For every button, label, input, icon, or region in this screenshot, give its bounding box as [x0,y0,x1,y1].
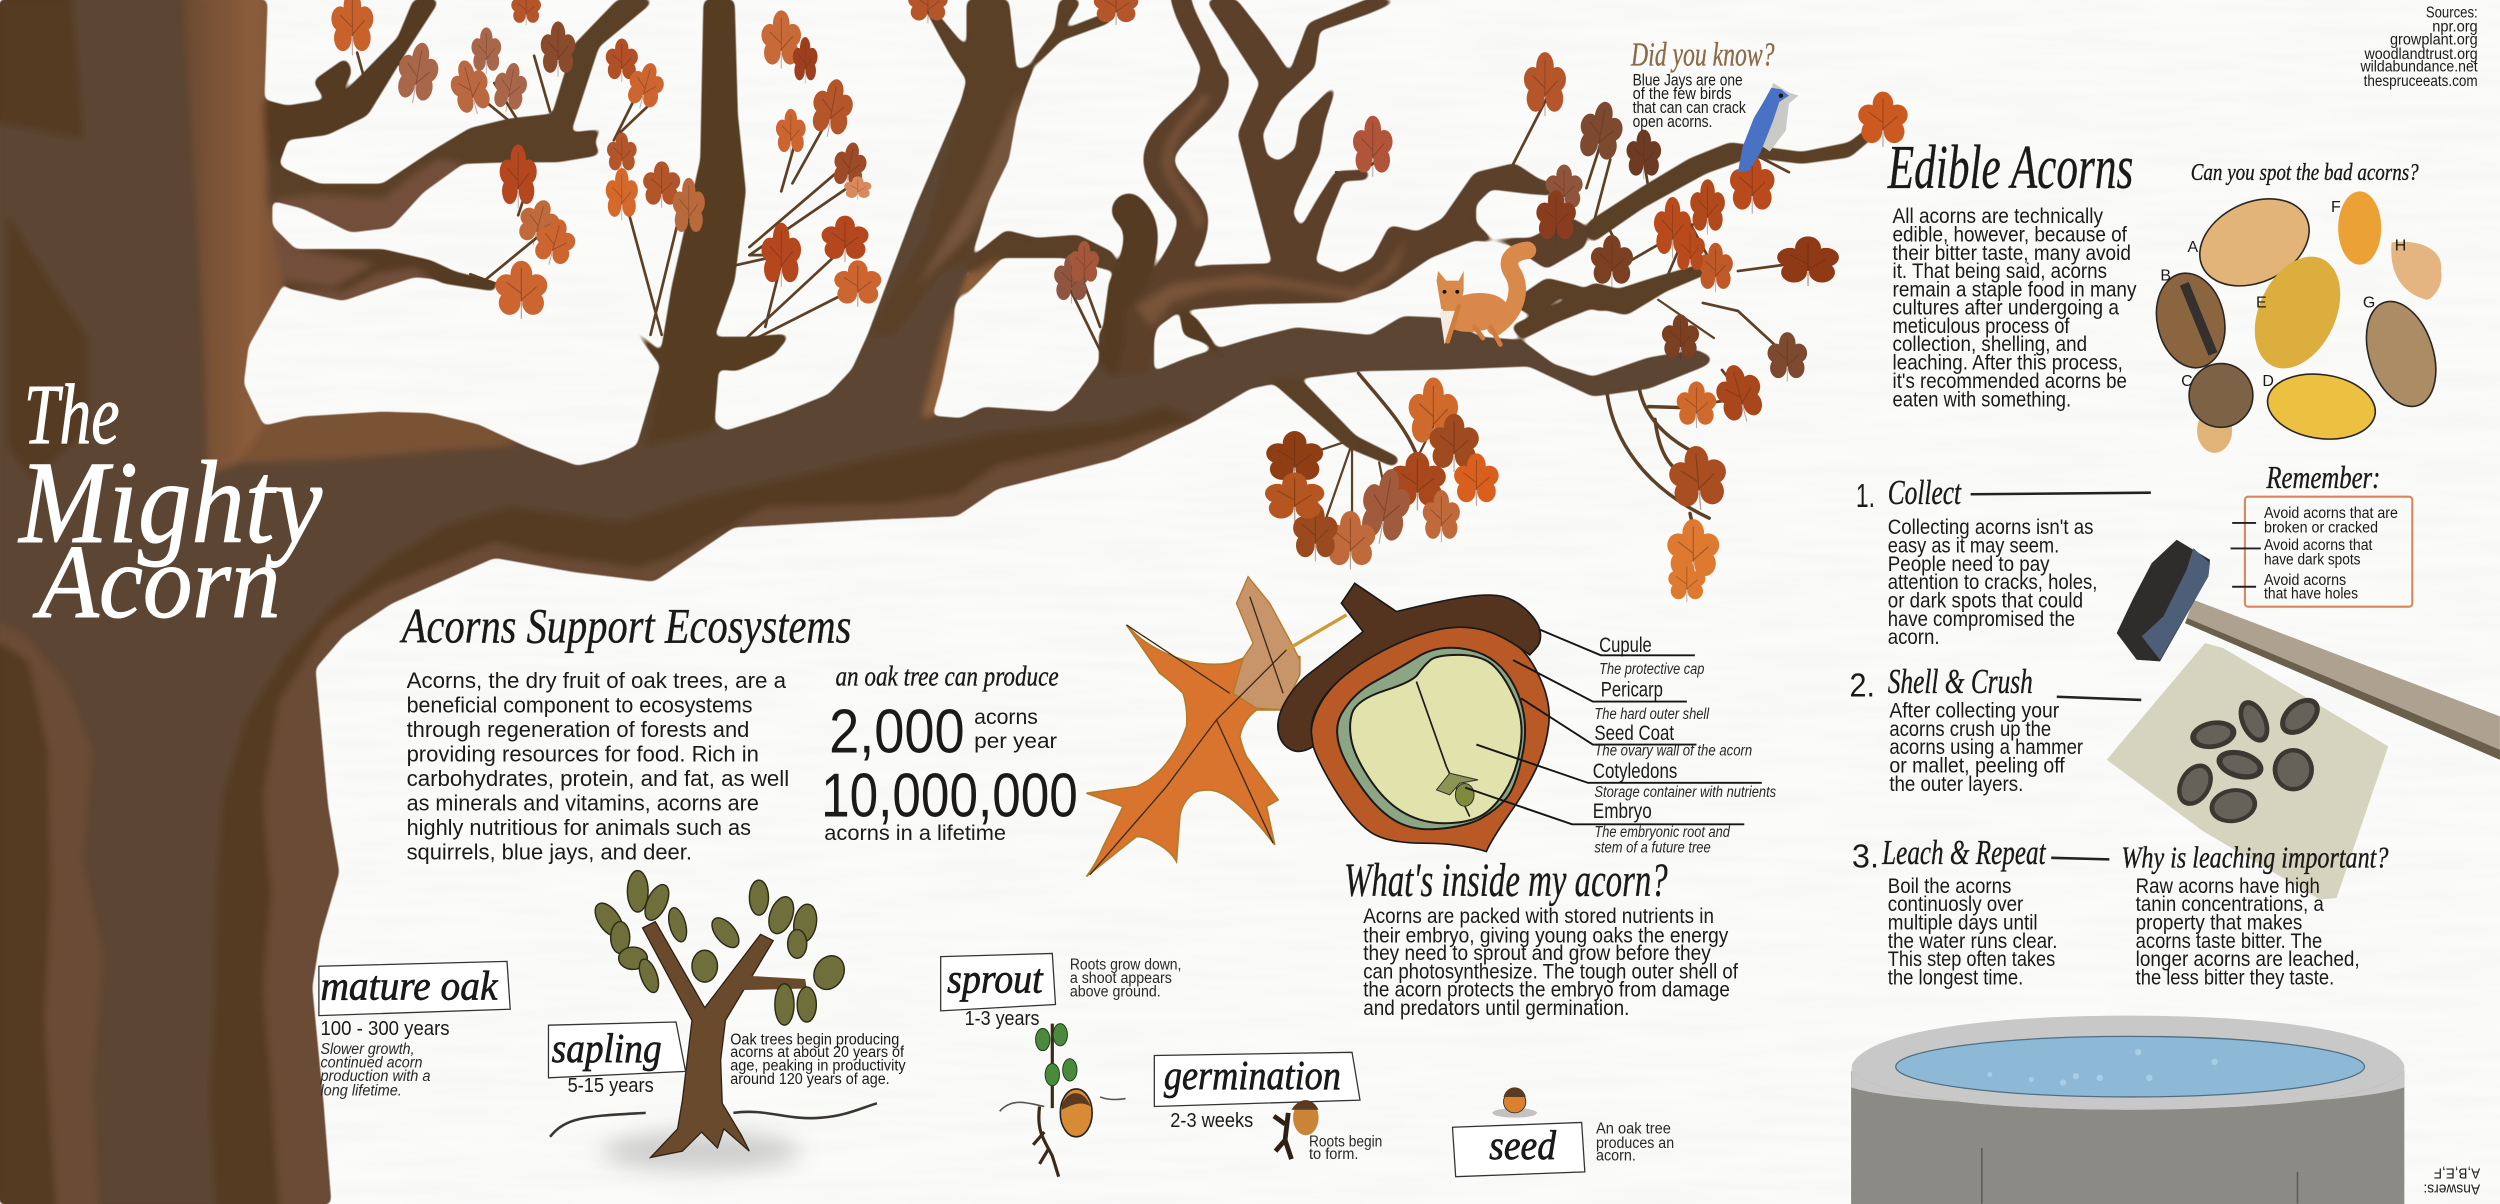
leaves: upper left canopy [331,0,1138,319]
text block: edible acorns [1893,204,2137,411]
dark band along limb and trunk [210,407,1196,1204]
callout: did you know: of the few birds [1633,84,1732,103]
label: sapling: sapling [552,1025,662,1071]
text block: ecosystems: Acorns, the dry fruit of oak trees, are a [407,668,787,693]
label: sprout [941,953,1181,1030]
label: seed: seed [1489,1122,1556,1168]
label: mature oak: Slower growth, [320,1041,415,1058]
title: The [24,366,120,462]
acorn part callouts: The embryonic root and [1594,824,1731,841]
icon: squirrel [1437,250,1527,344]
text block: inside the acorn: Acorns are packed with stored nutrients in [1363,904,1714,928]
title: Mighty [17,437,323,568]
quiz: can you spot the bad acorns: G [2363,295,2375,312]
illustration: oak leaf [1086,577,1346,877]
text block: edible acorns: edible, however, because of [1893,223,2128,247]
step 1: collect: attention to cracks, holes, [1888,570,2097,594]
callout: remember: broken or cracked [2264,520,2378,537]
callout: remember: Remember: [2266,460,2380,495]
text block: inside the acorn: can photosynthesize. The tough outer shell of [1363,959,1739,983]
step 1: collect: 1. [1856,478,1875,515]
step 2: shell and crush: or mallet, peeling off [1889,753,2066,777]
sources: growplant.org [2390,32,2478,49]
acorn part callouts: Seed Coat [1594,721,1674,745]
callout: remember [2231,460,2412,607]
heading: Acorns Support Ecosystems: Acorns Support Ecosystems [399,599,851,654]
callout: why is leaching important: property that makes [2136,911,2302,935]
label: germination [1154,1052,1382,1163]
text block: inside the acorn: their embryo, giving young oaks the energy [1363,923,1729,947]
label: germination: to form. [1309,1146,1358,1163]
callout: did you know [1630,36,1775,131]
text block: edible acorns: it's recommended acorns be [1893,369,2127,393]
quiz: can you spot the bad acorns: D [2262,373,2274,390]
big fork branch [869,0,1118,335]
right upper limb [1116,164,1585,375]
text block: ecosystems: carbohydrates, protein, and fat, as well [407,766,789,791]
right fork with tip [1207,0,1398,265]
step 2: shell and crush: Shell & Crush [1888,662,2033,701]
label: mature oak [319,961,510,1099]
callout: did you know: that can can crack [1633,98,1746,117]
text block: inside the acorn [1363,904,1739,1020]
text block: sapling note [730,1031,906,1088]
label: germination: germination [1164,1052,1341,1098]
upside-down answers: Answers: [2423,1181,2480,1198]
illustration: germinating acorn [1274,1100,1319,1159]
label: sprout: sprout [947,956,1044,1002]
text block: edible acorns: cultures after undergoing a [1893,296,2119,320]
text block: edible acorns: leaching. After this process, [1893,351,2123,375]
label: mature oak: production with a [320,1068,431,1085]
step 3: leach and repeat: continuosly over [1888,892,2023,916]
callout: why is leaching important: longer acorns are leached, [2136,947,2360,971]
heading: edible acorns: Edible Acorns [1887,134,2133,202]
text block: ecosystems: beneficial component to ecosystems [407,693,753,718]
stats: acorn production: 2,000 [829,698,965,767]
illustration: sprout [1000,1024,1126,1177]
step 2: shell and crush [1849,662,2141,796]
illustration: acorn cross-section [1278,583,1549,852]
text block: sapling note: acorns at about 20 years of [730,1044,905,1061]
text block: ecosystems: through regeneration of forests and [407,717,749,742]
label: seed [1452,1121,1674,1177]
step 2: shell and crush: acorns crush up the [1889,717,2051,741]
acorn part callouts: Pericarp [1601,678,1663,702]
stats: acorn production: acorns in a lifetime [824,821,1006,845]
callout: remember: Avoid acorns that are [2264,505,2398,522]
step 1: collect: People need to pay [1888,552,2050,576]
text block: ecosystems: as minerals and vitamins, acorns are [407,790,759,815]
quiz: can you spot the bad acorns: B [2160,268,2171,285]
pale rim of lower trunk [263,418,1196,1204]
upper left branches [263,0,438,161]
text block: ecosystems: squirrels, blue jays, and deer. [407,839,692,864]
sources: thespruceeats.com [2364,73,2478,90]
step 2: shell and crush: After collecting your [1889,698,2059,722]
acorn part callouts: The hard outer shell [1594,706,1710,723]
stats: acorn production: per year [974,729,1057,753]
inner trunk dark and pale panels [0,0,83,139]
acorn part callouts: Storage container with nutrients [1594,784,1776,801]
step 1: collect: have compromised the [1888,607,2075,631]
quiz: can you spot the bad acorns: A [2188,239,2198,256]
text block: edible acorns: meticulous process of [1893,314,2070,338]
step 3: leach and repeat: Leach & Repeat [1881,833,2046,872]
label: sprout: 1-3 years [965,1008,1040,1030]
label: sapling [548,1022,686,1097]
callout: remember: that have holes [2264,586,2358,603]
thin lower twigs [1307,300,1714,550]
label: germination: 2-3 weeks [1170,1110,1253,1132]
quiz: can you spot the bad acorns: F [2331,199,2341,216]
step 2: shell and crush: acorns using a hammer [1889,735,2083,759]
step 2: shell and crush: 2. [1849,668,1875,705]
step 3: leach and repeat [1852,833,2109,990]
callout: remember: have dark spots [2264,551,2361,568]
text block: edible acorns: collection, shelling, and [1893,332,2087,356]
step 1: collect [1856,473,2151,649]
leaves: hanging clusters [1265,378,1729,602]
callout: remember: Avoid acorns [2264,572,2346,589]
quiz: can you spot the bad acorns [2148,159,2448,453]
text block: edible acorns: All acorns are technically [1893,204,2103,228]
text block: ecosystems: highly nutritious for animals such as [407,815,751,840]
callout: why is leaching important [2121,839,2389,990]
stats: acorn production: acorns [974,705,1038,729]
arch branch [966,231,1116,274]
sources: wildabundance.net [2360,59,2478,76]
step 3: leach and repeat: This step often takes [1888,947,2055,971]
upside-down answers [2423,1165,2480,1198]
upside-down answers: A,B,E,F [2434,1165,2480,1182]
illustration: hammer [2117,540,2500,760]
label: sapling: 5-15 years [568,1074,654,1097]
step 3: leach and repeat: the water runs clear. [1888,929,2058,953]
callout: did you know: Blue Jays are one [1633,70,1743,89]
sources: woodlandtrust.org [2364,46,2478,63]
step 3: leach and repeat: multiple days until [1888,911,2038,935]
step 1: collect: or dark spots that could [1888,588,2083,612]
label: seed: An oak tree [1596,1121,1671,1138]
hanging stub under limb [1180,309,1224,359]
step 2: shell and crush: the outer layers. [1889,772,2023,796]
acorn part callouts: Cotyledons [1593,759,1677,783]
text block: ecosystems [407,668,789,864]
branch tips [1511,261,1719,338]
step 3: leach and repeat: Boil the acorns [1888,874,2011,898]
stats: acorn production [821,661,1078,845]
quiz: can you spot the bad acorns: H [2395,237,2406,254]
callout: did you know: Did you know? [1630,36,1775,73]
acorn part callouts: The protective cap [1599,661,1704,678]
label: mature oak: mature oak [320,963,498,1009]
text block: inside the acorn: and predators until germination. [1363,996,1629,1020]
text block: edible acorns: eaten with something. [1893,387,2071,411]
acorn part callouts: Embryo [1593,799,1652,823]
title [17,366,323,640]
step 1: collect: acorn. [1888,625,1940,649]
label: mature oak: 100 - 300 years [320,1017,450,1040]
step 1: collect: easy as it may seem. [1888,533,2059,557]
step 3: leach and repeat: the longest time. [1888,966,2023,990]
title: Acorn [33,523,281,640]
step 1: collect: Collect [1888,473,1962,512]
main trunk and great limb [0,0,1712,1204]
callout: why is leaching important: Raw acorns have high [2136,874,2320,898]
callout: did you know: open acorns. [1633,112,1712,131]
tree trunk and branches [0,0,1891,1204]
icon: blue jay [1738,83,1798,172]
acorn part callouts: The ovary wall of the acorn [1594,743,1752,760]
thin leaf twigs [357,53,1808,405]
quiz: can you spot the bad acorns: E [2256,295,2267,312]
text block: ecosystems: providing resources for food. Rich in [407,741,759,766]
callout: why is leaching important: the less bitter they taste. [2136,966,2334,990]
text block: inside the acorn: the acorn protects the embryo from damage [1363,977,1730,1001]
text block: edible acorns: their bitter taste, many avoid [1893,241,2131,265]
acorn part callouts [1465,630,1776,856]
label: seed: acorn. [1596,1148,1636,1165]
heading: what's inside my acorn: What's inside my acorn? [1344,854,1668,907]
illustration: sapling tree [550,871,877,1172]
quiz: can you spot the bad acorns: Can you spot the bad acorns? [2191,159,2419,186]
label: mature oak: long lifetime. [320,1082,402,1099]
acorn part callouts: stem of a future tree [1594,839,1711,856]
sources [2360,5,2478,90]
wavy branch and stub [1116,0,1213,359]
callout: remember: Avoid acorns that [2264,537,2373,554]
sources: npr.org [2432,19,2478,36]
step 1: collect: Collecting acorns isn't as [1888,515,2093,539]
callout: why is leaching important: tanin concentrations, a [2136,892,2324,916]
central branch [587,0,789,446]
text block: sapling note: Oak trees begin producing [730,1031,899,1048]
label: sprout: a shoot appears [1070,970,1172,987]
label: sprout: above ground. [1070,983,1161,1000]
acorn part callouts: Cupule [1599,633,1652,657]
callout: why is leaching important: acorns taste bitter. The [2136,929,2322,953]
illustration: seed acorn [1492,1087,1537,1118]
illustration: boiling pot [1851,1016,2404,1204]
text block: edible acorns: it. That being said, acorns [1893,259,2107,283]
sources: Sources: [2426,5,2478,22]
leaves: right canopy [1353,52,1908,428]
label: sprout: Roots grow down, [1070,956,1181,973]
callout: why is leaching important: Why is leaching important? [2121,839,2389,874]
stats: acorn production: 10,000,000 [821,761,1078,830]
text block: sapling note: age, peaking in productivity [730,1058,906,1075]
text block: inside the acorn: they need to sprout and grow before they [1363,941,1711,965]
label: mature oak: continued acorn [320,1054,423,1071]
step 3: leach and repeat: 3. [1852,838,1879,875]
quiz: can you spot the bad acorns: C [2181,373,2193,390]
label: germination: Roots begin [1309,1133,1382,1150]
stats: acorn production: an oak tree can produce [835,661,1059,693]
illustration: stone board with crushed acorns [2107,643,2388,900]
text block: sapling note: around 120 years of age. [730,1071,890,1088]
text block: edible acorns: remain a staple food in many [1893,277,2137,301]
label: seed: produces an [1596,1135,1674,1152]
